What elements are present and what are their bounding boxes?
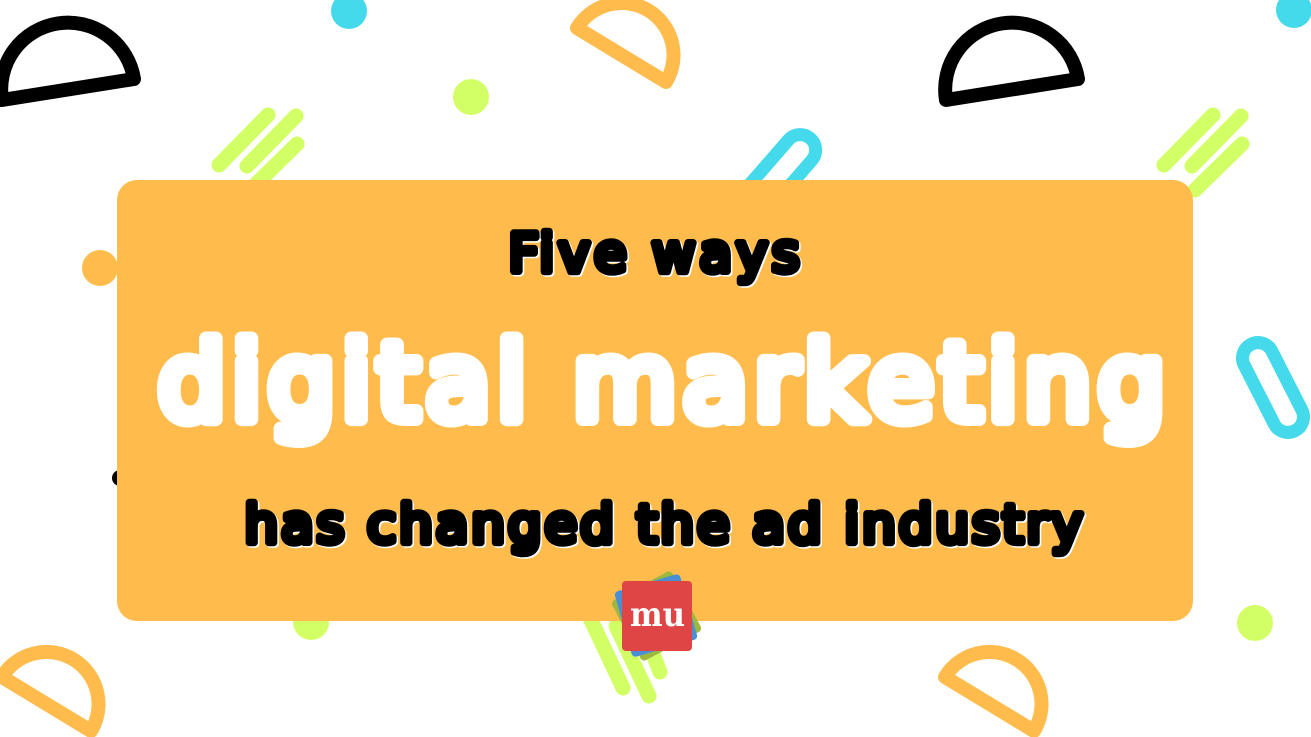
heading: has changed the ad industry: has changed the ad industry	[246, 496, 1084, 557]
heading: Five ways: Five ways	[510, 225, 801, 286]
heading: Five ways: Five ways	[508, 224, 800, 284]
heading: digital marketing: digital marketing	[158, 321, 1165, 444]
circle: lime bottom right	[1237, 605, 1273, 641]
circle: cyan top right	[1276, 0, 1311, 28]
shape: orange half circle bottom left	[2, 652, 99, 731]
circle: black left	[112, 470, 128, 486]
shape: orange half circle bottom right	[945, 652, 1042, 731]
capsule: cyan right	[1237, 337, 1309, 438]
circle: orange left	[82, 250, 118, 286]
circle: cyan top	[331, 0, 367, 29]
lines: lime stripes right	[1164, 115, 1242, 190]
heading: has changed the ad industry: has changed the ad industry	[244, 494, 1082, 556]
panel: title background	[117, 180, 1193, 621]
lines: lime stripes bottom	[590, 618, 660, 696]
capsule: cyan top	[735, 128, 822, 222]
shape: black half circle left	[1, 23, 134, 100]
logo: mu stacked squares	[611, 570, 702, 662]
shape: orange half circle top	[577, 3, 674, 82]
shape: black half circle right	[945, 23, 1078, 100]
circle: lime bottom left	[293, 604, 329, 640]
logo: mu stacked squares: mu	[630, 595, 685, 635]
lines: lime stripes left	[219, 115, 297, 190]
circle: lime top	[453, 79, 489, 115]
